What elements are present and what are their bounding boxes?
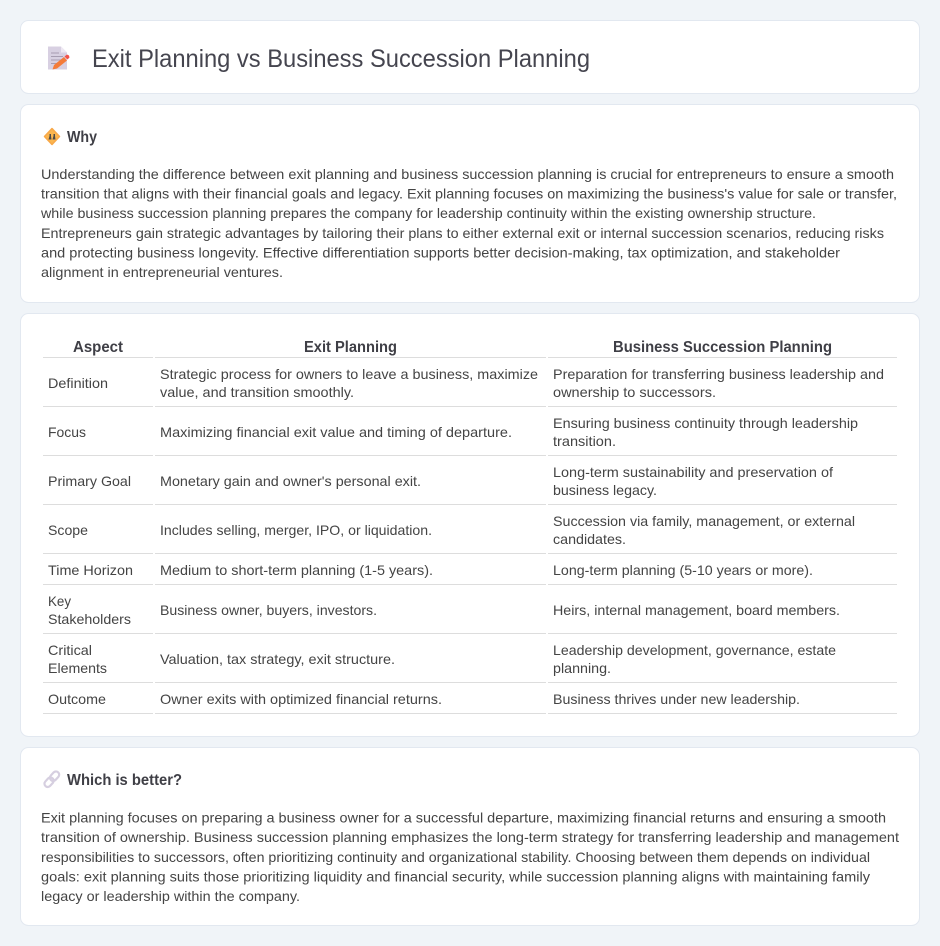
row: scope: candidates. xyxy=(553,531,626,547)
text block: which is better: Exit planning focuses on preparing a business owner for a successful departure, maximizing financial returns and ensuring a smooth xyxy=(41,810,886,826)
row: critical elements: Critical xyxy=(48,642,92,658)
heading: which is better: Which is better? xyxy=(67,772,182,789)
text block: why: while business succession planning prepares the company for leadership continuity within the existing ownership structure. xyxy=(40,205,816,221)
icon: memo with pencil xyxy=(48,46,70,70)
row: scope: Includes selling, merger, IPO, or liquidation. xyxy=(160,522,432,538)
text block: why xyxy=(40,166,897,280)
text block: why: and protecting business longevity. Effective differentiation supports better decision-making, tax optimization, and stakeholder xyxy=(41,244,840,260)
panel: title xyxy=(20,20,920,94)
icon: orange diamond sign xyxy=(44,128,60,144)
row: critical elements: Valuation, tax strategy, exit structure. xyxy=(160,651,395,667)
row: definition: Preparation for transferring business leadership and xyxy=(553,366,884,382)
panel: why xyxy=(20,104,920,302)
row: definition xyxy=(48,366,884,400)
row: focus: transition. xyxy=(553,433,616,449)
row: scope xyxy=(48,513,855,547)
text block: why: Understanding the difference between exit planning and business succession planning is crucial for entrepreneurs to ensure a smooth xyxy=(41,166,894,182)
row: key stakeholders: Stakeholders xyxy=(48,611,131,627)
row: time horizon xyxy=(48,562,813,578)
row: definition: ownership to successors. xyxy=(553,384,716,400)
row: focus: Maximizing financial exit value and timing of departure. xyxy=(160,424,512,440)
row: critical elements: Leadership development, governance, estate xyxy=(553,642,836,658)
heading: why: Why xyxy=(67,129,97,146)
row: key stakeholders xyxy=(48,593,840,627)
row: critical elements: Elements xyxy=(48,660,107,676)
row: outcome xyxy=(48,691,800,707)
text block: which is better: legacy or leadership within the company. xyxy=(41,888,300,904)
row: outcome: Owner exits with optimized financial returns. xyxy=(160,691,442,707)
row: primary goal: business legacy. xyxy=(553,482,657,498)
row: primary goal xyxy=(48,464,833,498)
row: focus: Ensuring business continuity through leadership xyxy=(553,415,858,431)
row: time horizon: Long-term planning (5-10 years or more). xyxy=(553,562,813,578)
text block: why: alignment in entrepreneurial ventures. xyxy=(41,264,283,280)
text block: why: Entrepreneurs gain strategic advantages by tailoring their plans to either external exit or internal succession scenarios, reducing risks xyxy=(41,225,884,241)
icon: link xyxy=(43,770,60,788)
table header: Exit Planning xyxy=(304,339,397,356)
text block: which is better: responsibilities to successors, often prioritizing continuity and organizational stability. Choosing between them depends on individual xyxy=(41,849,870,865)
row: outcome: Business thrives under new leadership. xyxy=(553,691,800,707)
row: definition: Strategic process for owners to leave a business, maximize xyxy=(160,366,538,382)
row: scope: Scope xyxy=(48,522,88,538)
row: time horizon: Time Horizon xyxy=(48,562,133,578)
row: key stakeholders: Key xyxy=(48,593,71,609)
text block: which is better xyxy=(41,810,899,904)
row: focus xyxy=(48,415,858,449)
row: primary goal: Primary Goal xyxy=(48,473,131,489)
row: key stakeholders: Heirs, internal management, board members. xyxy=(553,602,840,618)
table header: Business Succession Planning xyxy=(613,339,832,356)
row: outcome: Outcome xyxy=(48,691,106,707)
panel: which is better xyxy=(20,748,920,926)
row: definition: Definition xyxy=(48,375,108,391)
title text: Exit Planning vs Business Succession Planning xyxy=(92,45,590,73)
row: primary goal: Long-term sustainability and preservation of xyxy=(553,464,833,480)
table header: Aspect xyxy=(73,339,124,356)
row: focus: Focus xyxy=(48,424,86,440)
row: primary goal: Monetary gain and owner's personal exit. xyxy=(160,473,421,489)
row: scope: Succession via family, management, or external xyxy=(553,513,855,529)
text block: which is better: transition of ownership. Business succession planning emphasizes the long-term strategy for transferring leadership and management xyxy=(41,829,899,845)
row: key stakeholders: Business owner, buyers, investors. xyxy=(160,602,377,618)
table header xyxy=(73,339,832,356)
row: definition: value, and transition smoothly. xyxy=(160,384,354,400)
text block: which is better: goals: exit planning suits those prioritizing liquidity and financial security, while succession planning aligns with maintaining family xyxy=(41,868,870,884)
panel: comparison table xyxy=(20,314,920,736)
row: critical elements xyxy=(48,642,836,676)
row: time horizon: Medium to short-term planning (1-5 years). xyxy=(160,562,433,578)
text block: why: transition that aligns with their financial goals and legacy. Exit planning focuses on maximizing the business's value for sale or transfer, xyxy=(41,186,897,202)
row: critical elements: planning. xyxy=(553,660,611,676)
